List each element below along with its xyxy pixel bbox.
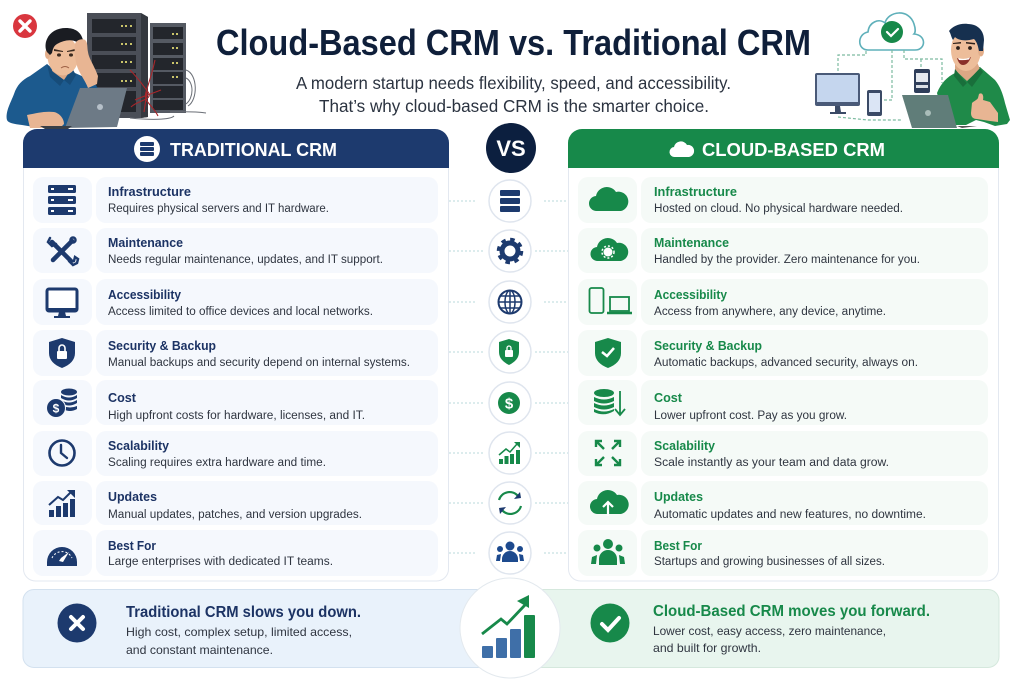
row: updates: Automatic updates and new features, no downtime. [654,509,926,521]
row: scalability: Scale instantly as your team and data grow. [654,457,889,469]
row: accessibility [578,279,988,325]
row: best for: Best For [654,538,702,553]
icon: cloud gear [590,238,628,261]
connectors [449,201,568,553]
row: cost [578,380,988,425]
callout: traditional CRM summary: and constant maintenance. [126,643,273,657]
row: scalability [33,431,438,476]
icon: red x badge [13,14,37,38]
row: best for [578,530,988,576]
row: scalability: Scalability [108,438,170,453]
row: accessibility [33,279,438,325]
icon: coins [46,388,77,418]
panel header [23,129,449,168]
row: updates [578,481,988,525]
panel header [568,129,999,168]
row: best for [33,530,438,576]
header text: TRADITIONAL CRM [170,139,337,160]
row: maintenance: Maintenance [654,235,729,250]
row: cost [33,380,438,425]
icon: growth chart [489,432,531,474]
badge: VS: VS [496,136,526,161]
callout: cloud CRM summary [530,590,999,668]
row: best for: Startups and growing businesses of all sizes. [654,556,885,568]
row: accessibility: Accessibility [654,287,728,302]
row: security: Manual backups and security depend on internal systems. [108,357,410,369]
panel: traditional CRM [23,129,449,581]
icon: monitor [47,289,77,318]
panel body [568,140,998,581]
device: tablet [914,69,930,93]
panel body [24,140,448,581]
man in blue shirt [7,28,127,129]
row: maintenance [578,228,988,273]
row: maintenance: Handled by the provider. Zero maintenance for you. [654,254,920,266]
subtitle: That’s why cloud-based CRM is the smarter choice. [319,96,709,116]
row: infrastructure: Requires physical servers and IT hardware. [108,203,329,215]
row: accessibility: Accessibility [108,287,182,302]
icon: growth bars [49,490,75,517]
server racks [87,13,206,119]
icon: coins: $ [53,402,60,416]
row: infrastructure [578,177,988,223]
icon: gauge [47,547,77,566]
bars [482,615,535,658]
icon: team [591,539,625,565]
row: scalability: Scalability [654,438,716,453]
row: security: Automatic backups, advanced security, always on. [654,357,918,369]
dashed connections [838,50,942,120]
row: best for: Large enterprises with dedicated IT teams. [108,556,333,568]
icon: globe [489,281,531,323]
header text: CLOUD-BASED CRM [702,139,885,160]
icon: tools [48,238,78,265]
device: monitor [815,73,860,114]
row: maintenance: Maintenance [108,235,183,250]
center column icons [489,180,531,574]
icon: header cloud [669,141,694,157]
row: updates: Updates [108,489,157,504]
icon: clock [50,440,74,466]
panel: cloud-based CRM [568,129,999,581]
icon: gear [489,230,531,272]
row: accessibility: Access from anywhere, any device, anytime. [654,306,886,318]
icon: header server [134,136,160,162]
callout: traditional CRM summary: Traditional CRM slows you down. [126,604,361,621]
icon: shield check [595,338,621,368]
row: updates: Manual updates, patches, and version upgrades. [108,509,362,521]
icon: database down arrow [594,389,625,415]
row: best for: Best For [108,538,156,553]
icon: check circle [590,604,630,642]
row: infrastructure: Infrastructure [654,184,737,199]
icon: phone and laptop [590,288,632,313]
icon: people [489,532,531,574]
subtitle [296,73,731,116]
row: scalability: Scaling requires extra hardware and time. [108,457,326,469]
callout: traditional CRM summary [23,590,493,668]
row: infrastructure: Hosted on cloud. No physical hardware needed. [654,203,903,215]
icon: expand arrows [596,441,620,465]
icon: cloud upload [590,490,629,516]
arrow [482,595,529,634]
row: infrastructure [33,177,438,223]
row: cost: Cost [108,390,137,405]
row: infrastructure: Infrastructure [108,184,191,199]
icon: dollar: $ [505,396,514,412]
row: security [578,330,988,376]
row: accessibility: Access limited to office devices and local networks. [108,306,373,318]
row: security: Security & Backup [654,338,762,353]
illustration: happy man with cloud [815,13,1010,128]
subtitle: A modern startup needs flexibility, speed, and accessibility. [296,73,731,93]
illustration: stressed man with servers [7,13,206,129]
icon: server [48,185,76,215]
man in green shirt [902,24,1010,128]
icon: sync [489,482,531,524]
row: maintenance: Needs regular maintenance, updates, and IT support. [108,254,383,266]
row: cost: High upfront costs for hardware, licenses, and IT. [108,410,365,422]
icon: shield lock [49,338,75,368]
icon: server [489,180,531,222]
icon: shield lock [489,331,531,373]
row: updates [33,481,438,525]
callout: cloud CRM summary: Cloud-Based CRM moves you forward. [653,603,930,620]
icon: x circle [58,604,96,642]
row: cost: Cost [654,390,683,405]
icon: cloud [589,187,628,211]
row: updates: Updates [654,489,703,504]
center growth chart badge [460,578,560,678]
row: maintenance [33,228,438,273]
callout: traditional CRM summary: High cost, complex setup, limited access, [126,625,352,639]
icon: dollar [489,382,531,424]
device: phone [867,90,882,116]
callout: cloud CRM summary: Lower cost, easy access, zero maintenance, [653,624,886,638]
row: security [33,330,438,376]
row: scalability [578,431,988,476]
row: security: Security & Backup [108,338,216,353]
icon: cloud with check [860,13,924,50]
title: Cloud-Based CRM vs. Traditional CRM [216,22,811,63]
callout: cloud CRM summary: and built for growth. [653,641,761,655]
row: cost: Lower upfront cost. Pay as you grow. [654,410,847,422]
badge: VS [486,123,536,173]
